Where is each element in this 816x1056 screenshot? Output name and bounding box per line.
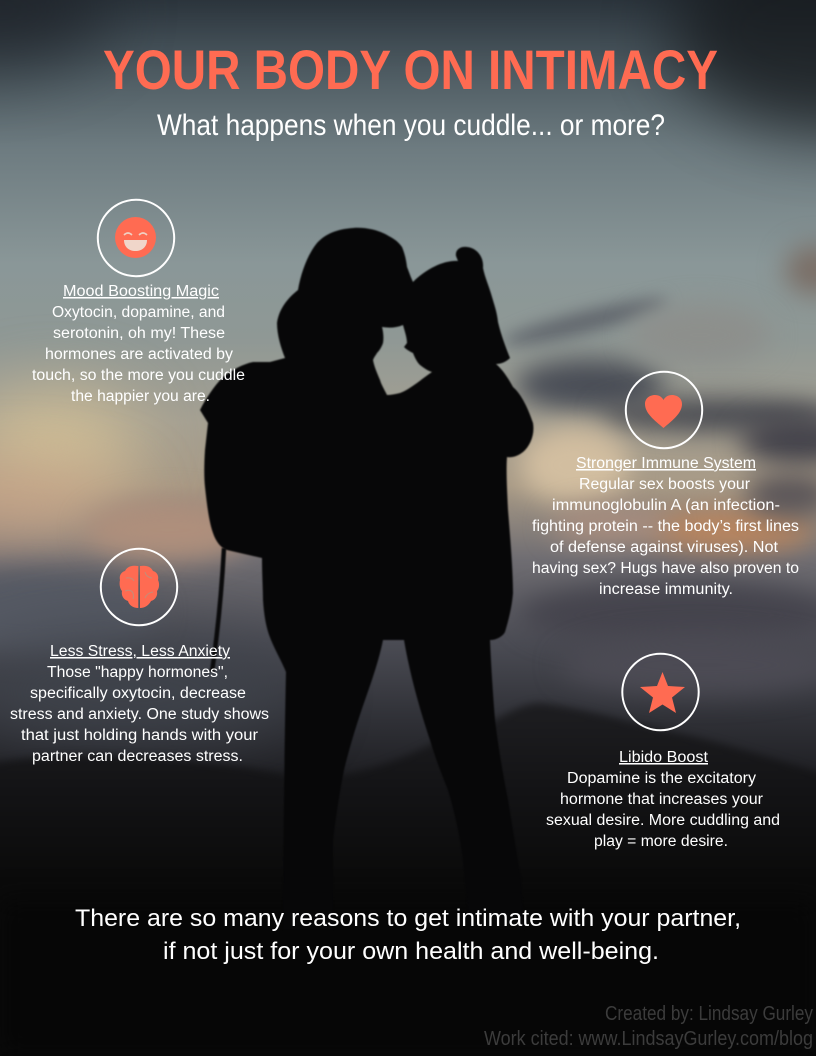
heading: Less Stress, Less Anxiety	[50, 643, 230, 660]
panel: mood boosting magic	[32, 200, 245, 405]
body text	[532, 476, 799, 598]
icon: brain	[101, 549, 177, 625]
panel: less stress, less anxiety	[10, 549, 269, 765]
body text	[10, 664, 269, 765]
body text: Regular sex boosts your	[579, 476, 750, 493]
body text: Dopamine is the excitatory	[567, 770, 756, 787]
closing statement	[75, 905, 741, 965]
panel: libido boost	[546, 654, 780, 850]
heading: Mood Boosting Magic	[63, 283, 219, 300]
body text	[546, 770, 780, 850]
closing statement: if not just for your own health and well-being.	[163, 938, 659, 965]
body text: Oxytocin, dopamine, and	[52, 304, 225, 321]
body text: touch, so the more you cuddle	[32, 367, 245, 384]
heading: Libido Boost	[619, 749, 709, 766]
title: YOUR BODY ON INTIMACY	[103, 38, 718, 101]
body text: that just holding hands with your	[21, 727, 258, 744]
body text: play = more desire.	[594, 833, 728, 850]
body text: partner can decreases stress.	[32, 748, 243, 765]
body text: increase immunity.	[599, 581, 733, 598]
icon: star	[622, 654, 699, 730]
body text: the happier you are.	[71, 388, 210, 405]
panel: stronger immune system	[532, 372, 799, 598]
subtitle: What happens when you cuddle... or more?	[157, 109, 665, 142]
body text: having sex? Hugs have also proven to	[532, 560, 799, 577]
body text: of defense against viruses). Not	[550, 539, 779, 556]
body text: hormones are activated by	[45, 346, 233, 363]
body text	[32, 304, 245, 405]
body text: specifically oxytocin, decrease	[30, 685, 246, 702]
icon: heart	[626, 372, 702, 448]
body text: immunoglobulin A (an infection-	[552, 497, 780, 514]
body text: Those "happy hormones",	[47, 664, 228, 681]
walking pole	[212, 548, 224, 672]
icon: laughing face	[98, 200, 174, 276]
body text: sexual desire. More cuddling and	[546, 812, 780, 829]
credits	[484, 1003, 813, 1050]
heading: Stronger Immune System	[576, 455, 756, 472]
body text: fighting protein -- the body’s first lines	[532, 518, 799, 535]
closing statement: There are so many reasons to get intimate with your partner,	[75, 905, 741, 932]
couple silhouette	[200, 228, 533, 930]
body text: stress and anxiety. One study shows	[10, 706, 269, 723]
body text: hormone that increases your	[560, 791, 763, 808]
body text: serotonin, oh my! These	[53, 325, 225, 342]
